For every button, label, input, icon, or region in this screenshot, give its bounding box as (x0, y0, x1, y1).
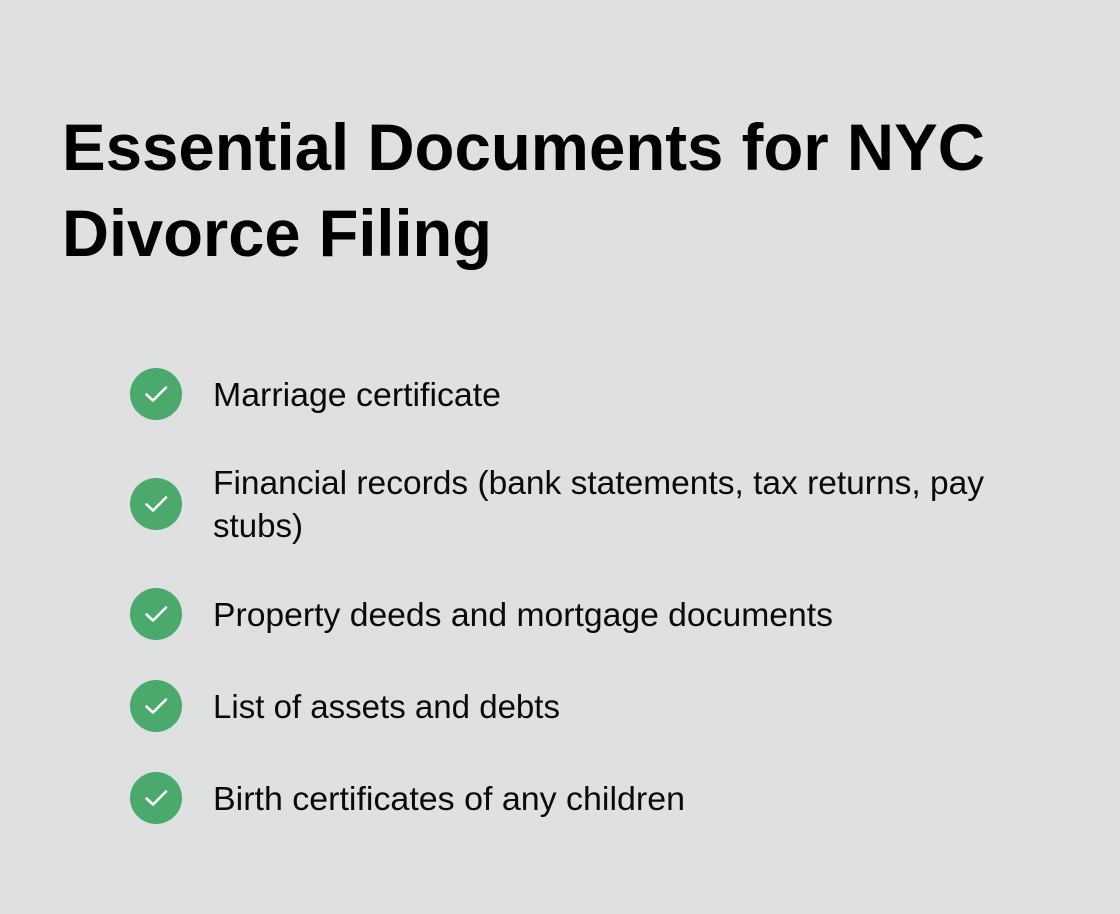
item: property deeds: Property deeds and mortgage documents (213, 597, 833, 634)
item: marriage certificate (130, 368, 501, 420)
item: financial records: stubs) (213, 508, 303, 545)
title: Divorce Filing (62, 196, 492, 270)
title: Essential Documents for NYC (62, 110, 985, 184)
item: financial records: Financial records (bank statements, tax returns, pay (213, 465, 984, 502)
item: assets and debts (130, 680, 560, 732)
item: financial records (130, 465, 984, 545)
title (62, 110, 985, 270)
item: birth certificates: Birth certificates of any children (213, 781, 685, 818)
item: property deeds (130, 588, 833, 640)
item: marriage certificate: Marriage certificate (213, 377, 501, 414)
item: assets and debts: List of assets and debts (213, 689, 560, 726)
checklist (130, 368, 984, 824)
item: birth certificates (130, 772, 685, 824)
